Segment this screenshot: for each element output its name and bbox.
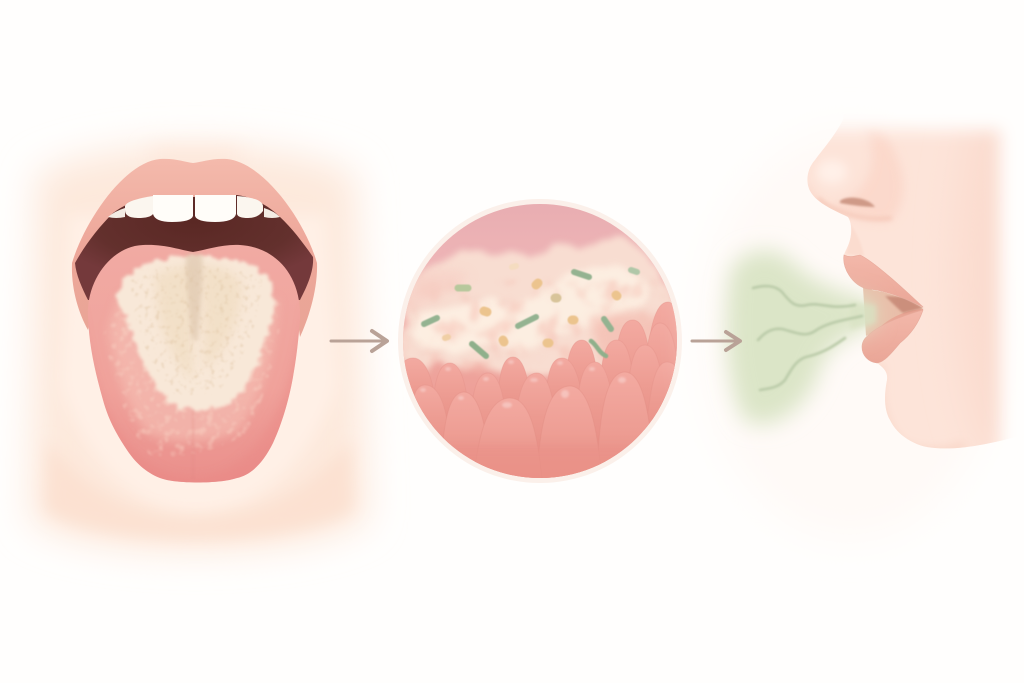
nostril: [840, 198, 875, 207]
lens content: [403, 204, 677, 478]
foreground bacteria: [472, 341, 606, 356]
chin shade: [934, 444, 962, 448]
coating layer: [400, 238, 680, 378]
panel: open mouth with coated tongue: [30, 145, 368, 552]
mouth cavity: [75, 195, 313, 300]
papillae highlights: [420, 360, 626, 408]
nose shading: [841, 134, 902, 216]
tongue tip in profile: [880, 309, 923, 327]
lips: [72, 159, 317, 337]
tongue coating: [118, 257, 273, 410]
cheek tone: [971, 140, 993, 414]
mouth interior: [863, 287, 923, 336]
green breath cloud: [726, 251, 876, 424]
tooth: [871, 282, 886, 292]
arrow: magnified view to breath: [692, 332, 740, 350]
upper lip: [844, 255, 923, 307]
lens ring: [398, 199, 682, 483]
philtrum shade: [848, 227, 862, 254]
soft background glow: [700, 130, 1000, 540]
bacteria and debris on coating: [424, 266, 637, 343]
central groove: [186, 254, 203, 340]
papillae, front row: [446, 372, 650, 478]
panel: face profile exhaling odour: [712, 122, 1008, 448]
lower lip: [862, 310, 923, 363]
coating fringe: [108, 295, 278, 442]
panel: magnified tongue surface: [398, 199, 682, 483]
face skin: [30, 145, 368, 552]
dark mouth shadow: [885, 296, 923, 313]
arrow: tongue to magnified view: [331, 331, 387, 351]
papillae, back rows: [404, 302, 677, 430]
face profile: [808, 123, 1007, 448]
lower shade: [458, 451, 622, 478]
upper teeth: [108, 195, 280, 222]
tongue: [88, 244, 299, 482]
papillae, middle rows: [414, 362, 609, 444]
